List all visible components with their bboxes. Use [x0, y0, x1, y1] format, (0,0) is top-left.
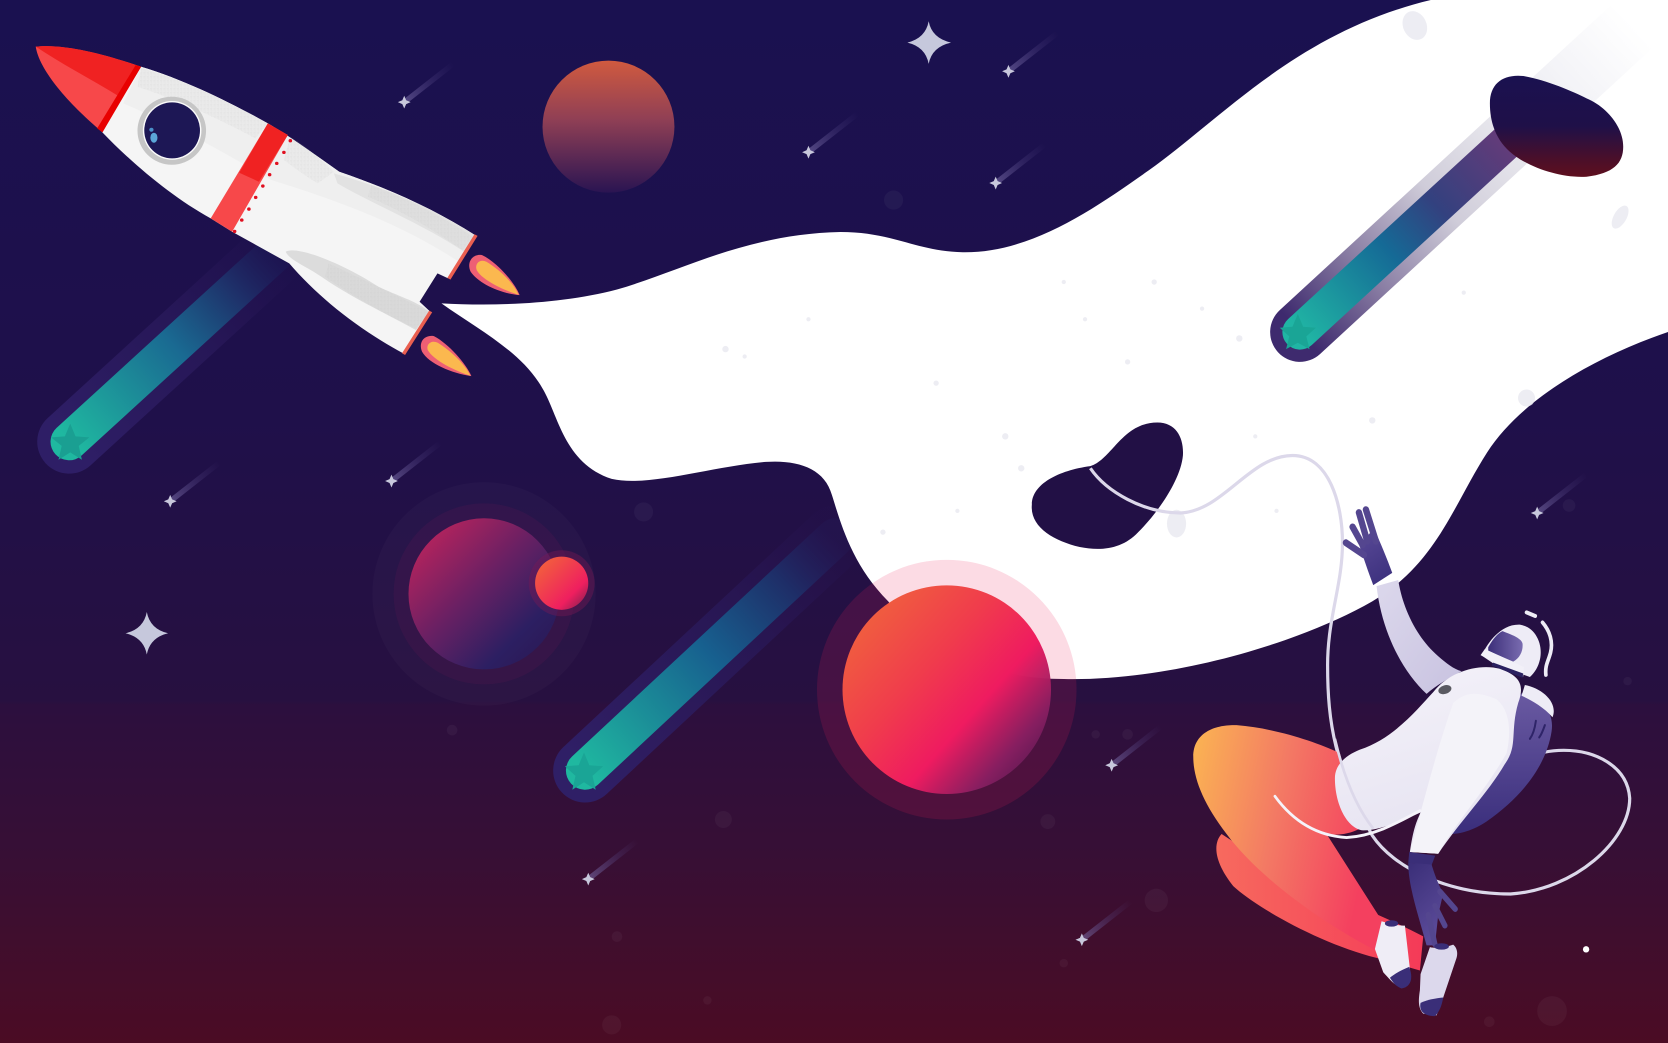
astronaut — [1193, 510, 1554, 1016]
white seam on leg — [1275, 796, 1420, 838]
comet on white: top right — [1280, 26, 1633, 349]
tether over torso — [1335, 739, 1373, 829]
rocket body — [102, 67, 475, 353]
white nebula stream — [441, 0, 1668, 679]
rocket — [36, 46, 520, 376]
porthole — [137, 97, 206, 165]
flame: upper — [469, 255, 520, 295]
helmet antenna marks — [1527, 612, 1551, 675]
stipple on mid hull — [284, 137, 334, 183]
white dot — [1583, 946, 1589, 953]
comet: centre — [565, 537, 835, 790]
flame: lower — [421, 336, 471, 376]
arm: raised — [1377, 580, 1462, 694]
rivets — [233, 139, 292, 233]
comet: left — [51, 250, 279, 460]
upper fin stipple — [368, 185, 473, 250]
stipple on upper hull — [137, 68, 268, 138]
planet: top red — [543, 61, 674, 193]
leg: front — [1193, 725, 1382, 951]
torso — [1335, 667, 1521, 854]
star: large top — [907, 21, 951, 64]
hole: top-right dark meteor — [1490, 76, 1623, 177]
tether behind astronaut — [1090, 456, 1630, 894]
boot: left — [1375, 920, 1411, 988]
cuff: lower arm — [1408, 852, 1435, 865]
engine edge strips — [404, 235, 476, 354]
backpack — [1450, 685, 1554, 834]
body shading — [123, 67, 475, 262]
glove: lower — [1408, 863, 1455, 945]
chest button — [1437, 684, 1452, 696]
arm fold highlight — [1410, 694, 1509, 854]
planet: big red with halo — [817, 560, 1077, 820]
shooting stars — [164, 33, 1586, 946]
planet: purple with halo — [372, 482, 596, 706]
boot: right — [1419, 943, 1457, 1016]
red band — [211, 123, 288, 232]
lower fin stipple — [325, 263, 429, 328]
lower fin shadow — [286, 250, 429, 330]
helmet — [1481, 625, 1541, 678]
hole: centre dark blob — [1032, 423, 1183, 549]
glove: raised — [1346, 510, 1392, 585]
upper fin shadow — [334, 173, 475, 252]
dust specks on dark sky — [447, 191, 1632, 1034]
nose cone — [36, 46, 141, 132]
star: large left — [126, 612, 168, 655]
leg: back — [1216, 834, 1423, 971]
planet: small red moon — [529, 550, 595, 616]
